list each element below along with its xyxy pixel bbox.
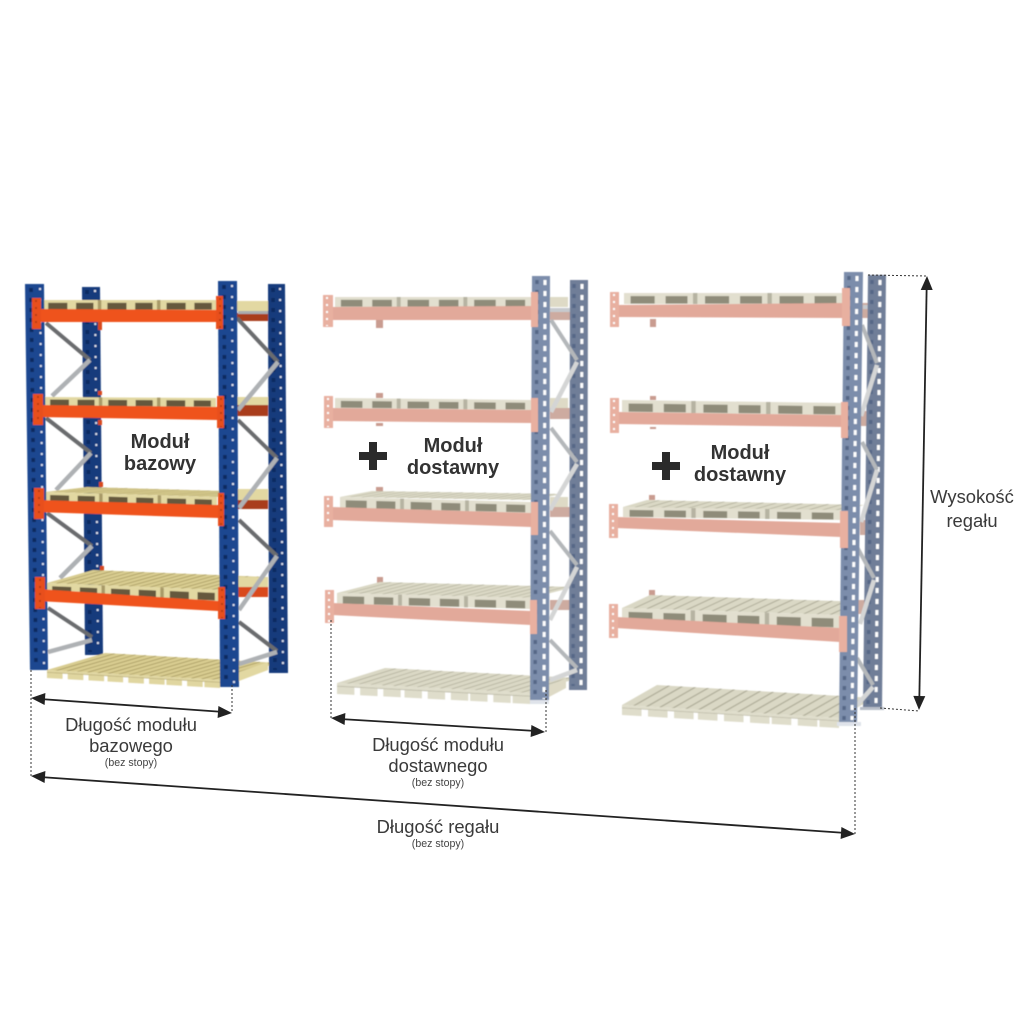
label: add-on module length: Długość modułu xyxy=(372,734,504,755)
label: rack height: Wysokość xyxy=(930,486,1014,507)
right bay pallets and back beams xyxy=(237,301,277,681)
heading: add-on module 2: Moduł xyxy=(711,442,770,464)
left frame braces xyxy=(46,323,92,652)
heading: add-on module 2: dostawny xyxy=(694,464,787,486)
front upright xyxy=(837,272,863,726)
label: rack length: (bez stopy) xyxy=(412,838,464,850)
back beam stubs xyxy=(858,303,879,614)
right bay pallets and back beams xyxy=(549,297,582,697)
label: rack length: Długość regału xyxy=(377,816,499,837)
label: base module length xyxy=(65,714,197,769)
beam tabs on back upright xyxy=(98,322,104,572)
panel: base module rack xyxy=(25,281,288,688)
label: base module length: (bez stopy) xyxy=(105,757,157,769)
icon: plus sign 1 xyxy=(359,442,387,470)
frame braces xyxy=(857,325,877,705)
heading: base module xyxy=(124,431,197,475)
label: rack height xyxy=(930,486,1014,531)
beam tabs xyxy=(376,320,383,583)
front upright xyxy=(530,276,550,704)
left front upright xyxy=(25,284,48,670)
dimension: add-on module length xyxy=(331,620,546,737)
label: add-on module length: (bez stopy) xyxy=(412,777,464,789)
frame braces xyxy=(550,320,577,680)
panel: add-on module 2 rack xyxy=(609,272,886,728)
back left upright xyxy=(82,287,103,655)
label: rack height: regału xyxy=(946,510,998,531)
heading: add-on module 2 xyxy=(694,442,787,486)
dimension: rack length xyxy=(31,708,855,839)
front beams pink xyxy=(609,288,850,652)
label: base module length: Długość modułu xyxy=(65,714,197,735)
dimension: rack height xyxy=(868,275,933,711)
pallets on decks xyxy=(43,300,278,688)
heading: add-on module 1 xyxy=(407,435,500,479)
back upright xyxy=(860,275,886,710)
right front upright xyxy=(218,281,239,687)
heading: add-on module 1: dostawny xyxy=(407,457,500,479)
heading: base module: Moduł xyxy=(131,431,190,453)
front beams orange xyxy=(32,296,225,619)
right frame braces xyxy=(237,318,278,664)
label: add-on module length xyxy=(372,734,504,789)
icon: plus sign 2 xyxy=(652,452,680,480)
panel: add-on module 1 rack xyxy=(323,276,588,704)
right frame back upright xyxy=(268,284,288,673)
pallets xyxy=(335,297,578,704)
label: add-on module length: dostawnego xyxy=(388,755,488,776)
label: rack length xyxy=(377,816,499,850)
dimension: base module length xyxy=(31,670,232,776)
back upright xyxy=(569,280,588,690)
heading: add-on module 1: Moduł xyxy=(424,435,483,457)
front beams pink xyxy=(323,292,538,634)
heading: base module: bazowy xyxy=(124,453,197,475)
label: base module length: bazowego xyxy=(89,735,173,756)
pallets xyxy=(622,293,874,728)
beam tabs xyxy=(649,319,656,596)
